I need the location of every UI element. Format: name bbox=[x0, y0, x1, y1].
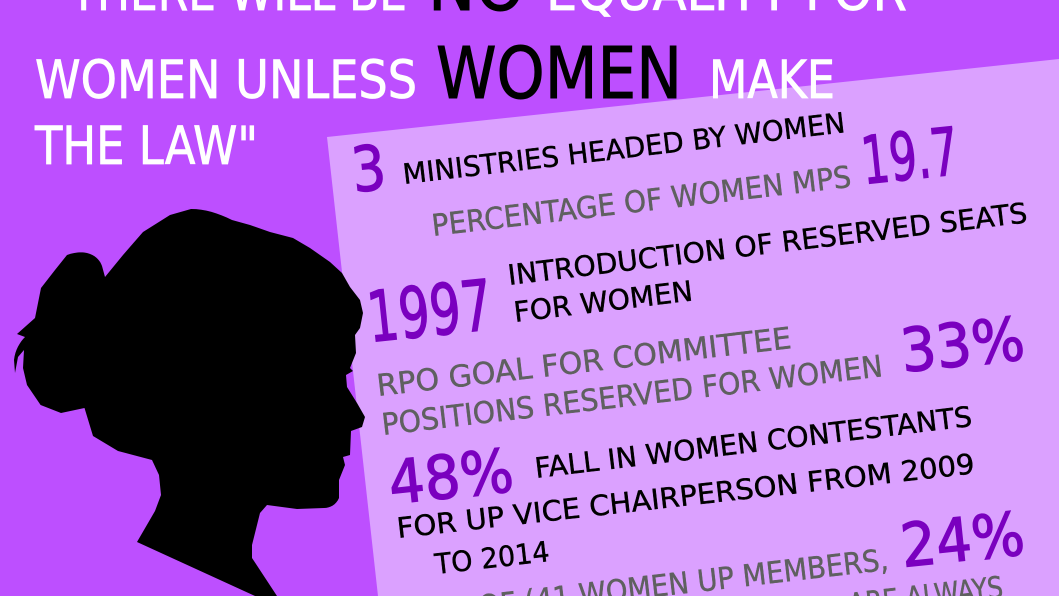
icon: woman silhouette in profile bbox=[14, 209, 365, 596]
stat: 1997 reserved seats: INTRODUCTION OF RESERVED SEATS bbox=[506, 196, 1029, 292]
stat: RPO goal 33%: RPO GOAL FOR COMMITTEE bbox=[375, 321, 793, 404]
stat: 1997 reserved seats bbox=[363, 196, 1029, 359]
stat: 1997 reserved seats: FOR WOMEN bbox=[512, 275, 695, 329]
panel: statistics background bbox=[327, 59, 1059, 596]
stat: 48% fall in women contestants: TO 2014 bbox=[432, 535, 551, 581]
stat: 24% of women UP members: 24% bbox=[897, 499, 1028, 582]
stat: 48% fall in women contestants: FOR UP VICE CHAIRPERSON FROM 2009 bbox=[395, 447, 976, 545]
stat: 3 ministries: MINISTRIES HEADED BY WOMEN bbox=[401, 106, 847, 191]
stat: 24% of women UP members bbox=[477, 499, 1028, 596]
stat: 1997 reserved seats: 1997 bbox=[363, 264, 496, 359]
stat: 48% fall in women contestants bbox=[385, 400, 976, 581]
title quote: MAKE bbox=[709, 50, 835, 111]
stat: percentage of women MPs: PERCENTAGE OF WOMEN MPS bbox=[430, 160, 853, 244]
stat: RPO goal 33% bbox=[375, 304, 1028, 443]
title quote bbox=[34, 0, 907, 177]
stat: 48% fall in women contestants: 48% bbox=[385, 436, 517, 519]
title quote: WOMEN bbox=[436, 32, 682, 115]
title quote: WOMEN UNLESS bbox=[35, 50, 417, 111]
stat: percentage of women MPs bbox=[430, 113, 962, 244]
stat: 48% fall in women contestants: FALL IN WOMEN CONTESTANTS bbox=[533, 400, 974, 485]
title quote: THE LAW" bbox=[34, 116, 258, 177]
stat: 3 ministries: 3 bbox=[348, 131, 389, 207]
stat: RPO goal 33%: POSITIONS RESERVED FOR WOMEN bbox=[380, 349, 884, 443]
stat: percentage of women MPs: 19.7 bbox=[858, 113, 962, 200]
stat: RPO goal 33%: 33% bbox=[897, 304, 1028, 387]
